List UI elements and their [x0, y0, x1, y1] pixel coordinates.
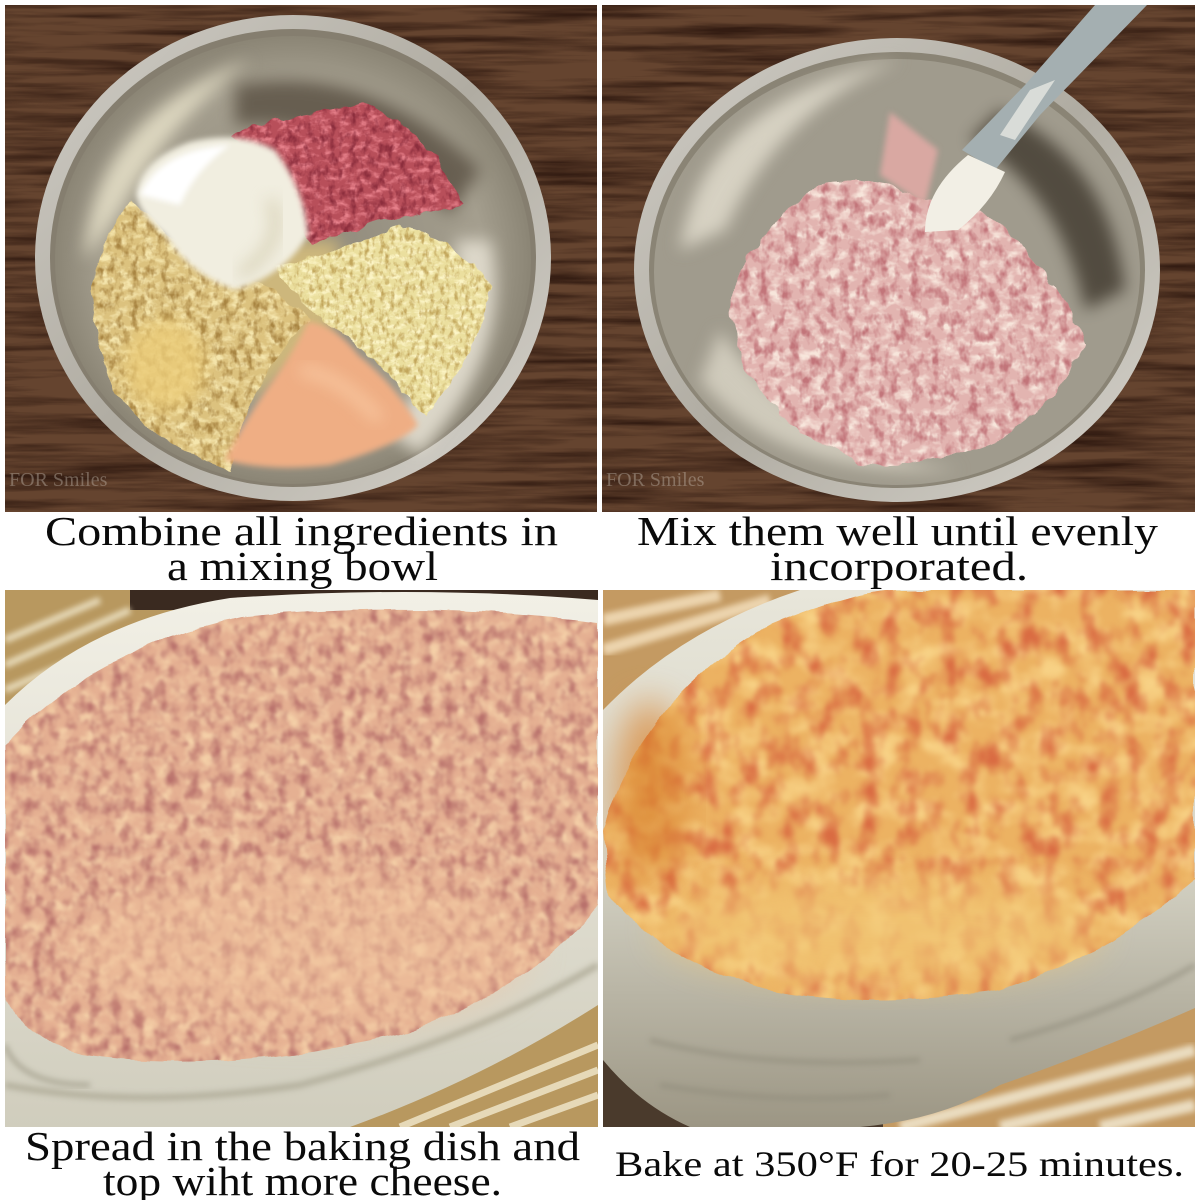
shredded swiss cheese [274, 226, 490, 416]
caption: step 2: Mix them well until evenly [637, 508, 1159, 554]
striped towel backdrop [603, 590, 1195, 1127]
caption: step 1: a mixing bowl [167, 543, 438, 589]
caption: step 2 [637, 508, 1159, 589]
sauerkraut [92, 198, 310, 470]
baked cheesy filling [603, 590, 1195, 1000]
watermark: FOR Smiles [9, 469, 108, 491]
white baking dish [603, 590, 1195, 1127]
white baking dish [5, 592, 598, 1127]
caption: step 3 [25, 1123, 580, 1200]
panel: step 1 photo, ingredients in bowl [5, 5, 597, 512]
caption: step 4: Bake at 350°F for 20-25 minutes. [615, 1144, 1184, 1184]
spatula [925, 5, 1147, 232]
russian dressing [225, 322, 418, 468]
panel: step 3 photo, spread in baking dish [5, 590, 600, 1127]
caption: step 3: Spread in the baking dish and [25, 1123, 580, 1169]
dip filling [5, 610, 598, 1062]
sour cream and cream cheese [136, 138, 308, 290]
panel: step 2 photo, mixed ingredients [602, 5, 1195, 512]
caption: step 1 [45, 508, 558, 589]
caption: step 1: Combine all ingredients in [45, 508, 558, 554]
caption: step 2: incorporated. [770, 543, 1028, 589]
striped towel and backdrop [5, 590, 600, 1127]
wood table [5, 5, 597, 512]
corned beef [232, 104, 464, 244]
steel mixing bowl [634, 38, 1160, 502]
steel mixing bowl [35, 15, 551, 501]
watermark: FOR Smiles [606, 469, 705, 491]
panel: step 4 photo, baked dip [603, 590, 1195, 1127]
mixed dip [732, 112, 1084, 464]
wood table [602, 5, 1195, 512]
food base under ingredients [252, 236, 346, 400]
